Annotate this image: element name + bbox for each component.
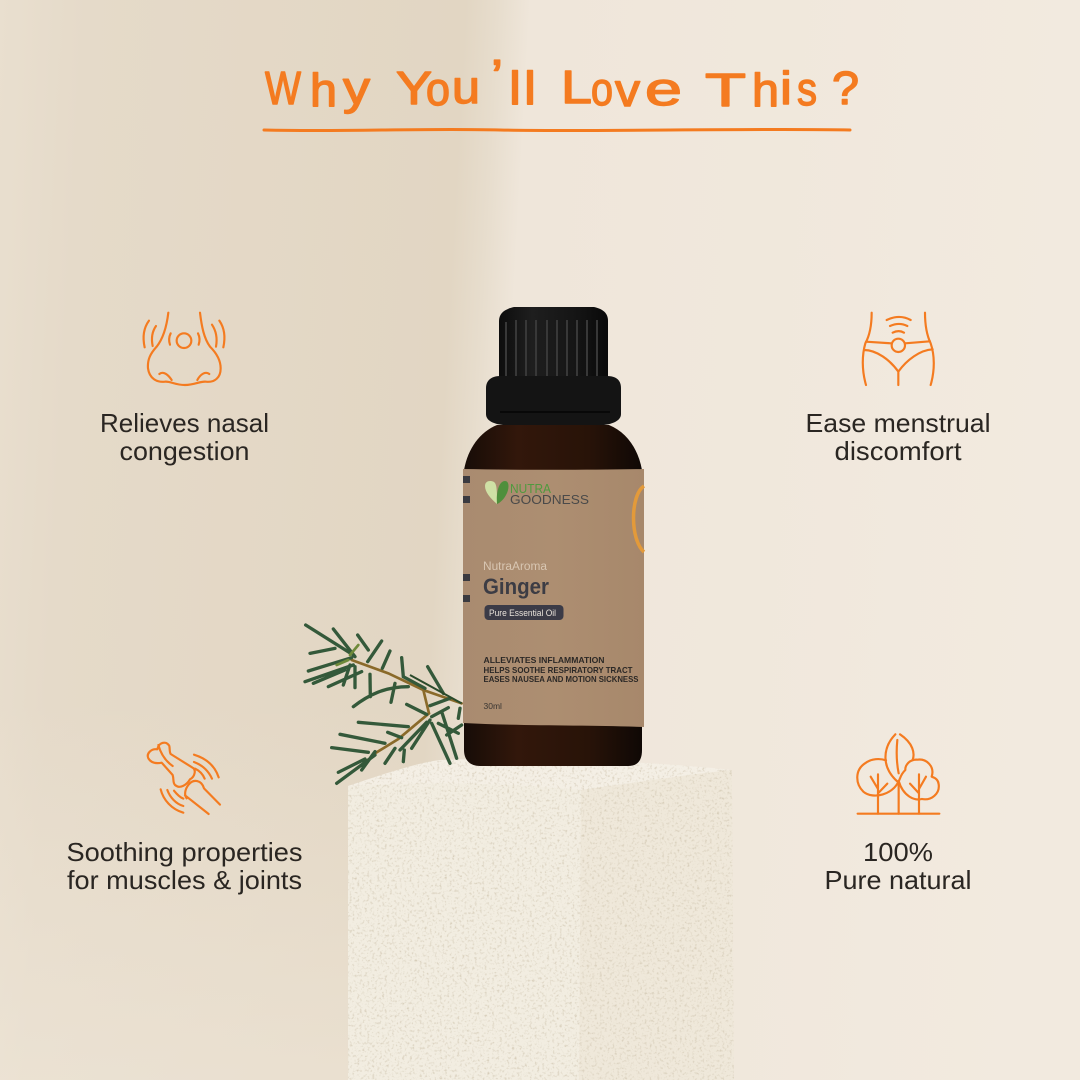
dropper cap <box>486 307 621 425</box>
title: Why You'll Love This?: l <box>524 62 536 114</box>
text: ease menstrual discomfort: discomfort <box>834 436 962 466</box>
icon: abdomen <box>863 313 934 385</box>
title: Why You'll Love This?: o <box>591 63 613 115</box>
title: Why You'll Love This?: e <box>645 63 682 115</box>
title: Why You'll Love This?: ? <box>832 62 859 114</box>
bottle <box>463 307 644 766</box>
text: soothing properties: Soothing properties <box>66 837 302 867</box>
title: Why You'll Love This?: h <box>752 64 779 116</box>
label benefits: ALLEVIATES INFLAMMATION <box>484 655 604 665</box>
icon: trees and leaf <box>857 734 939 814</box>
text: ease menstrual discomfort: Ease menstrual <box>806 408 990 438</box>
title: Why You'll Love This?: ’ <box>491 50 503 102</box>
title: Why You'll Love This?: Y <box>396 62 432 114</box>
seal arc <box>634 486 644 552</box>
stone pedestal <box>348 759 734 1080</box>
pill: pure essential oil: Pure Essential Oil <box>489 608 556 618</box>
label benefits: HELPS SOOTHE RESPIRATORY TRACT <box>484 665 633 675</box>
label benefits: EASES NAUSEA AND MOTION SICKNESS <box>484 674 639 684</box>
label: Ginger <box>483 574 549 599</box>
logo text: GOODNESS <box>510 492 589 507</box>
title: Why You'll Love This? <box>265 50 859 116</box>
title: Why You'll Love This?: s <box>797 63 817 115</box>
icon: joint bones <box>148 743 220 814</box>
logo text: NUTRA <box>510 481 551 496</box>
text: relieves nasal congestion: Relieves nasal <box>100 408 269 438</box>
pill: pure essential oil <box>484 605 564 620</box>
title: Why You'll Love This?: y <box>343 62 370 114</box>
title: Why You'll Love This?: v <box>615 64 640 116</box>
text: 100% pure natural: Pure natural <box>824 865 972 895</box>
label <box>463 469 644 727</box>
title: Why You'll Love This?: L <box>561 61 592 113</box>
volume: 30ml <box>484 701 502 711</box>
logo heart <box>485 481 508 504</box>
title: Why You'll Love This?: u <box>452 61 480 113</box>
product name: NutraAroma <box>483 561 548 573</box>
title: Why You'll Love This?: h <box>310 64 337 116</box>
title: Why You'll Love This?: l <box>509 62 521 114</box>
title: Why You'll Love This?: i <box>780 62 792 114</box>
text: soothing properties: for muscles & joints <box>67 865 302 895</box>
label side bars <box>463 476 470 602</box>
title: Why You'll Love This?: o <box>426 63 450 115</box>
sprig of leaves <box>305 625 462 783</box>
icon: nose <box>143 313 225 385</box>
text: relieves nasal congestion: congestion <box>120 436 250 466</box>
glass body <box>464 425 642 766</box>
title: Why You'll Love This?: W <box>265 62 301 114</box>
title underline <box>264 129 850 131</box>
text: 100% pure natural: 100% <box>863 837 933 867</box>
title: Why You'll Love This?: T <box>705 64 746 116</box>
